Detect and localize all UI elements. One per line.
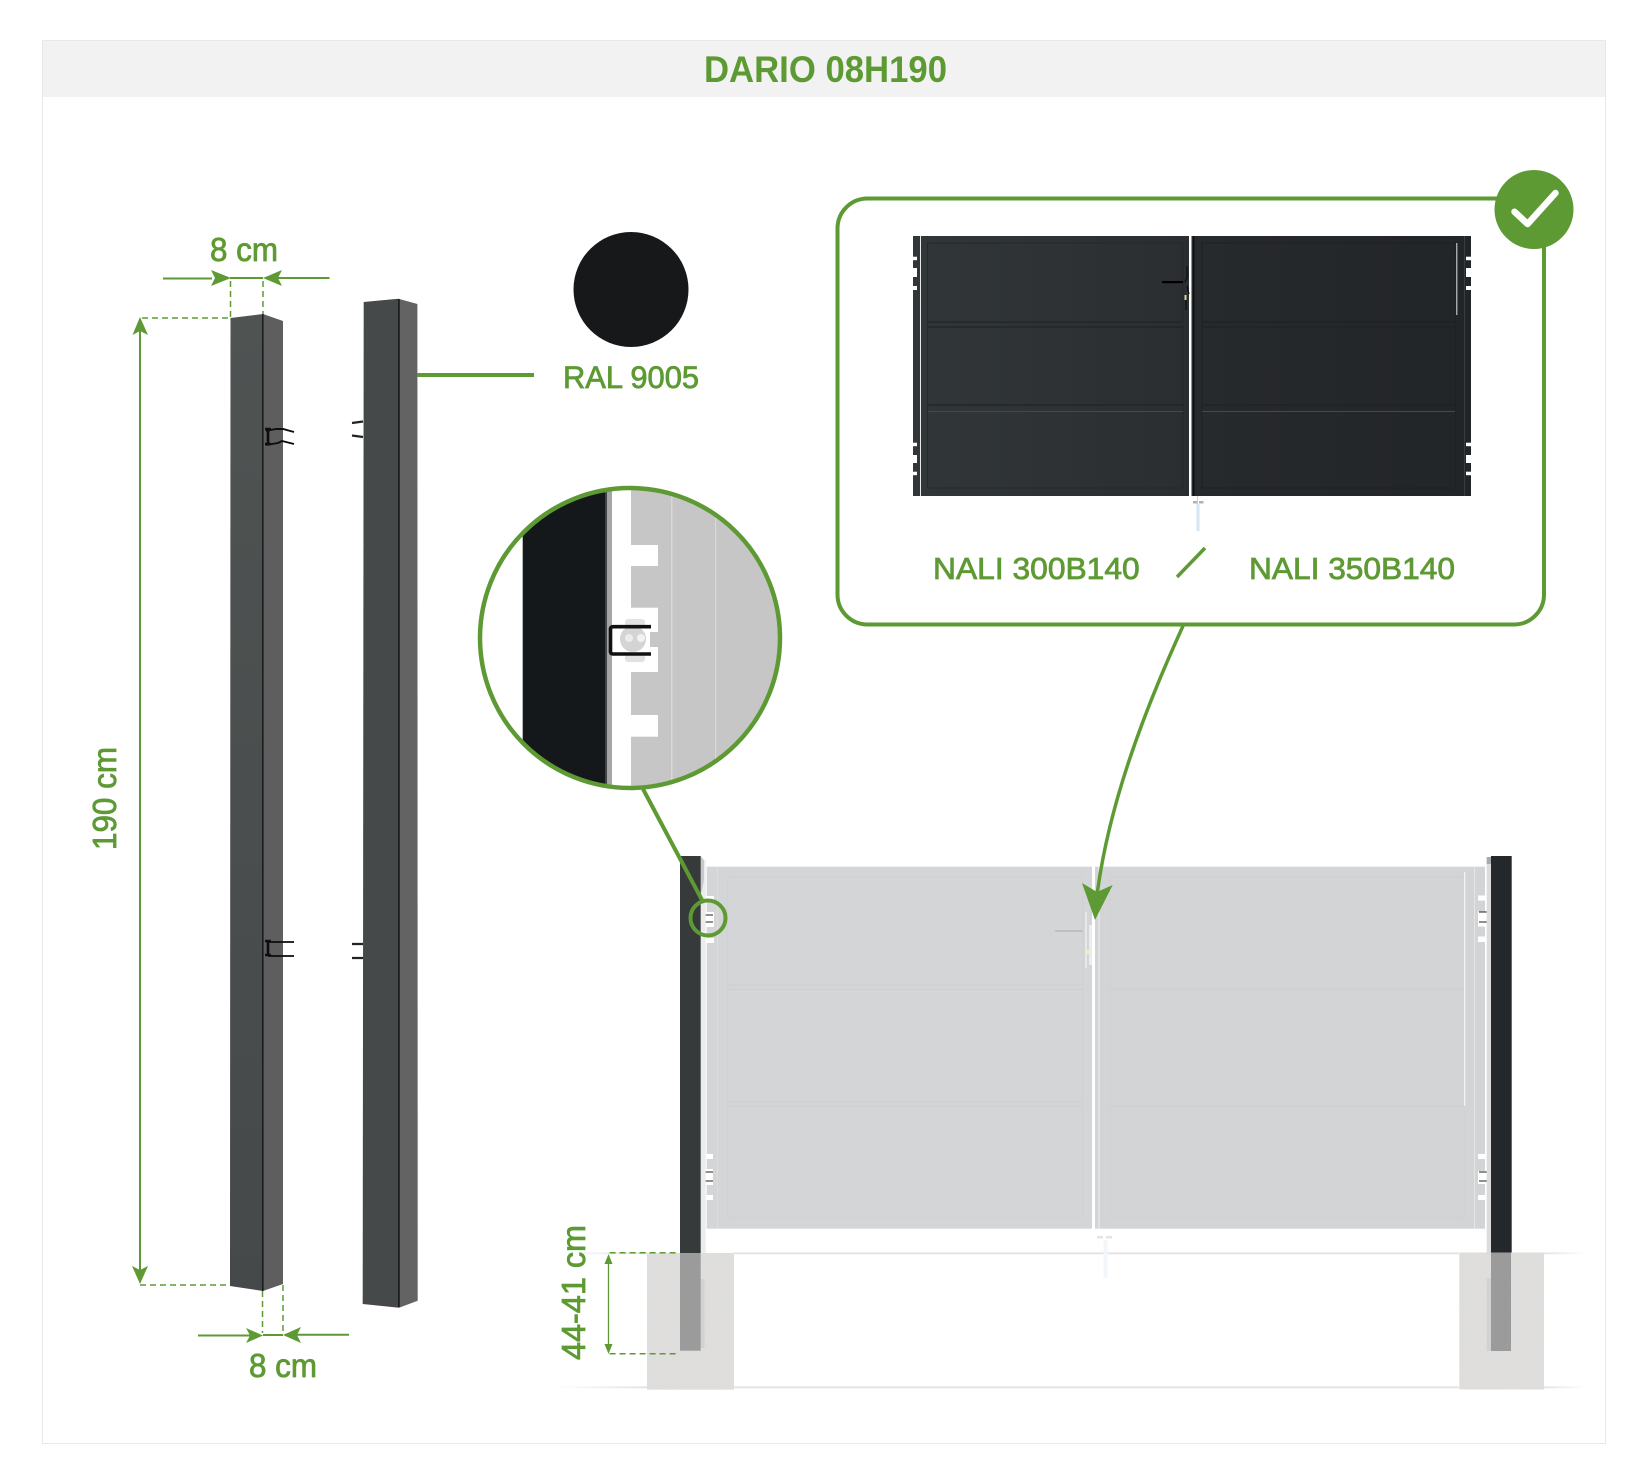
slash separator xyxy=(1177,548,1205,577)
hinge lower xyxy=(265,941,294,956)
label 8 cm bottom: 8 cm xyxy=(249,1347,317,1384)
check badge xyxy=(1494,170,1574,249)
colour swatch xyxy=(574,232,688,347)
colour label: RAL 9005 xyxy=(563,359,699,395)
curved arrow from callout to gate xyxy=(1082,626,1183,920)
ground lines xyxy=(555,1252,1587,1388)
ground stake faint xyxy=(1097,1236,1112,1278)
hinge upper xyxy=(265,429,294,445)
width dimension bottom xyxy=(198,1285,349,1384)
label 190 cm: 190 cm xyxy=(86,747,123,850)
title: DARIO 08H190 xyxy=(704,49,947,90)
magnified hinge detail xyxy=(470,480,791,800)
right post xyxy=(1487,856,1512,1351)
gate product image xyxy=(913,236,1471,531)
width dimension top xyxy=(163,231,330,318)
door handle and lock xyxy=(1162,266,1189,310)
left post xyxy=(680,856,706,1351)
ground stake xyxy=(1193,496,1204,531)
post front view xyxy=(230,314,294,1291)
small hinge ring xyxy=(690,900,726,936)
concrete footing left xyxy=(647,1253,734,1390)
connector from detail to small ring xyxy=(643,789,702,900)
label 8 cm top: 8 cm xyxy=(210,231,278,268)
depth dimension xyxy=(555,1225,678,1360)
second post xyxy=(352,299,418,1308)
leader line to colour label xyxy=(417,373,534,377)
centre gap and lock xyxy=(1055,867,1095,1229)
gate installation drawing xyxy=(555,856,1587,1390)
height dimension xyxy=(86,317,230,1285)
label depth: 44-41 cm xyxy=(555,1225,592,1360)
post with hinges and dimensions xyxy=(86,231,349,1384)
callout: compatible gates xyxy=(838,198,1544,624)
title bar xyxy=(43,41,1605,97)
right gate leaf xyxy=(1095,867,1485,1229)
hinge marks xyxy=(701,912,1491,1181)
hinge cutouts xyxy=(706,896,1485,1200)
left gate leaf xyxy=(707,867,1092,1229)
model label left: NALI 300B140 xyxy=(933,551,1140,586)
model label right: NALI 350B140 xyxy=(1249,551,1455,586)
concrete footing right xyxy=(1459,1252,1544,1390)
